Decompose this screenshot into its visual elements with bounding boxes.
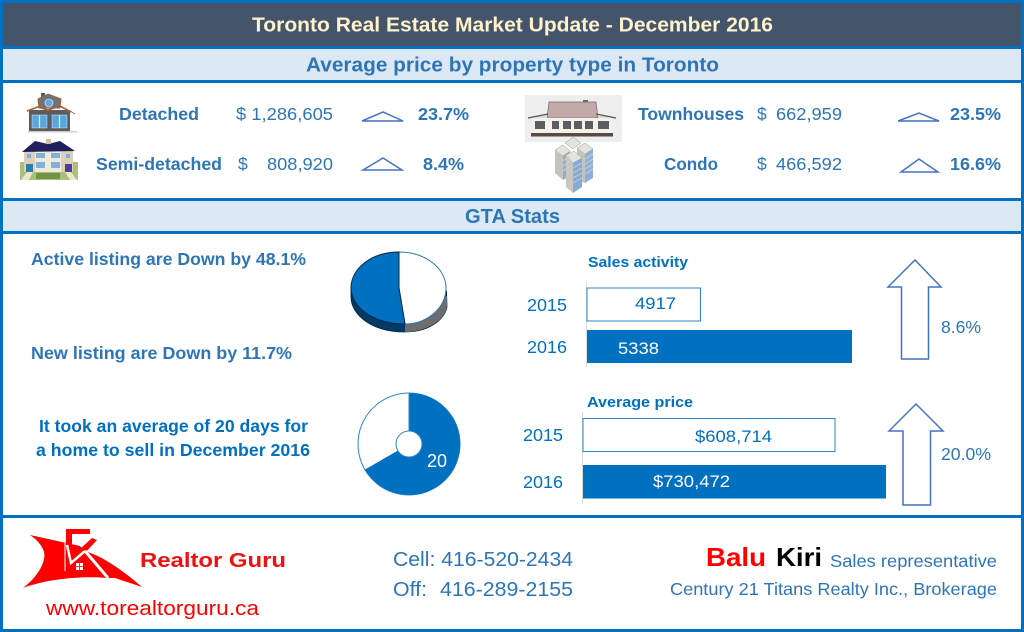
contact: phone numbers: Cell: 416-520-2434: [393, 549, 573, 571]
icon: semi-detached house: [20, 139, 78, 180]
bar 2016: [583, 465, 886, 498]
contact: phone numbers: Off:: [393, 579, 427, 601]
donut value: 20: [427, 451, 447, 471]
chart: average price: [523, 394, 886, 504]
triangle: Detached up: [362, 112, 403, 121]
arrow: sales up: [888, 260, 941, 359]
change: Condo: 16.6%: [950, 154, 1001, 174]
contact: phone numbers: 416-289-2155: [440, 579, 573, 601]
text: days to sell: It took an average of 20 days for: [39, 416, 308, 436]
price: Detached: $ 1,286,605: [236, 104, 333, 124]
triangle: Semi-detached up: [363, 158, 402, 170]
bar value $608,714: $608,714: [695, 427, 772, 446]
triangle: Condo up: [901, 159, 938, 172]
agent details: Sales representative: [830, 551, 997, 571]
bar 2015: [587, 288, 700, 321]
year label 2015: 2015: [523, 425, 563, 445]
text: active listings: Active listing are Down by 48.1%: [31, 249, 306, 269]
icon: townhouse: [525, 95, 622, 142]
website: www.torealtorguru.ca: [45, 598, 260, 620]
agent details: Balu: [706, 542, 766, 572]
panel: property prices: [3, 83, 1021, 198]
price: Semi-detached: 808,920: [267, 154, 333, 174]
label: Semi-detached: Semi-detached: [96, 154, 222, 174]
bar value 4917: 4917: [635, 294, 676, 313]
year label 2015: 2015: [527, 295, 567, 315]
chart title: Average price: [587, 394, 693, 411]
agent details: Kiri: [776, 542, 822, 572]
contact: phone numbers: [393, 549, 573, 601]
heading: GTA stats: GTA Stats: [465, 206, 560, 228]
panel: footer: [3, 518, 1021, 629]
icon: condo towers: [555, 137, 593, 193]
heading: average price by property type: Average price by property type in Toronto: [306, 54, 719, 76]
change: Townhouses: 23.5%: [950, 104, 1001, 124]
label: Townhouses: Townhouses: [638, 104, 744, 124]
text: sales change: 8.6%: [941, 317, 981, 337]
price: Semi-detached symbol: $: [238, 154, 248, 174]
change: Detached: 23.7%: [418, 104, 469, 124]
bar 2015: [583, 418, 835, 452]
label: Condo: Condo: [664, 154, 718, 174]
arrow: price up: [889, 404, 943, 505]
panel: GTA stats: [3, 234, 1021, 515]
chart: 3D pie of listings: [351, 252, 447, 332]
price: Townhouses symbol: $: [757, 104, 767, 124]
price: Condo symbol: $: [757, 154, 767, 174]
heading: average price by property type: [3, 49, 1021, 80]
price: Condo: 466,592: [776, 154, 842, 174]
agent details: [670, 542, 997, 599]
text: days to sell: [36, 416, 310, 460]
year label 2016: 2016: [523, 472, 563, 492]
text: days to sell: a home to sell in December 2016: [36, 440, 310, 460]
title: Toronto Real Estate Market Update - December 2016: [252, 14, 773, 36]
bar 2016: [587, 330, 852, 363]
label: Detached: Detached: [119, 104, 199, 124]
agent details: Century 21 Titans Realty Inc., Brokerage: [670, 579, 997, 599]
price: Townhouses: 662,959: [776, 104, 842, 124]
title: [3, 3, 1021, 46]
change: Semi-detached: 8.4%: [423, 154, 464, 174]
logo wordmark: Realtor Guru: [140, 550, 286, 572]
text: new listings: New listing are Down by 11.7%: [31, 343, 292, 363]
chart: donut of days on market: [358, 393, 460, 495]
heading: GTA stats: [3, 201, 1021, 231]
logo: Realtor Guru: [23, 529, 286, 588]
year label 2016: 2016: [527, 337, 567, 357]
text: price change: 20.0%: [941, 444, 991, 464]
triangle: Townhouses up: [898, 113, 939, 121]
icon: detached house: [27, 93, 77, 132]
bar value 5338: 5338: [618, 339, 659, 358]
chart: sales activity: [527, 254, 852, 367]
bar value $730,472: $730,472: [653, 472, 730, 491]
chart title: Sales activity: [588, 254, 689, 271]
